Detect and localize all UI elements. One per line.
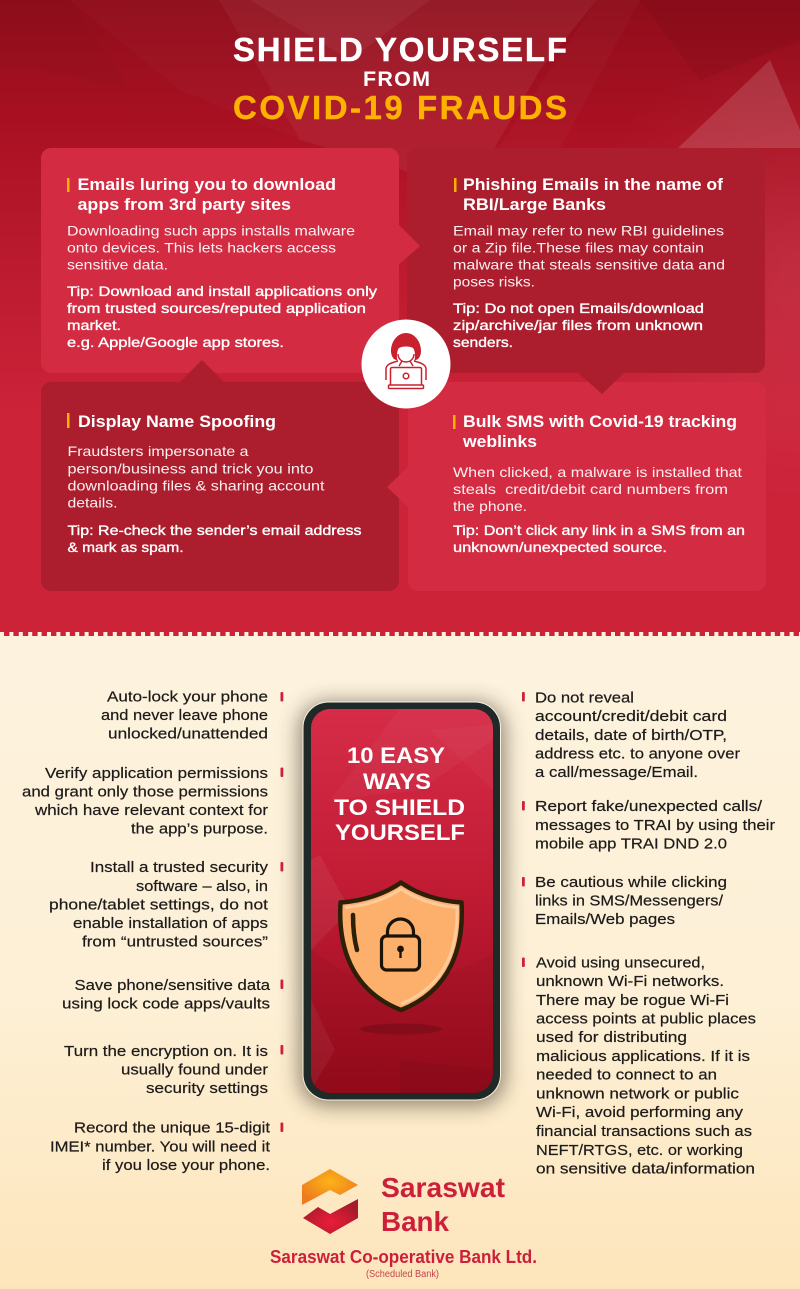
- right tips list: used for distributing: [536, 1030, 687, 1046]
- right tips list: Emails/Web pages: [535, 912, 675, 928]
- right tips list: address etc. to anyone over: [535, 746, 740, 762]
- panel: phishing emails card: RBI/Large Banks: [463, 196, 606, 214]
- left tips list: phone/tablet settings, do not: [49, 898, 268, 914]
- panel: emails luring card: Emails luring you to download: [78, 176, 336, 194]
- panel: phishing emails card: senders.: [453, 334, 513, 350]
- right tips list: on sensitive data/information: [536, 1162, 755, 1178]
- panel: display name spoofing card: [41, 382, 399, 591]
- panel: phishing emails card: Phishing Emails in the name of: [463, 176, 724, 194]
- panel: phishing emails card: or a Zip file.These files may contain: [453, 240, 704, 256]
- panel: phishing emails card: [407, 148, 765, 394]
- logo: Saraswat Bank: (Scheduled Bank): [366, 1269, 439, 1280]
- title: SHIELD YOURSELF: [233, 31, 567, 68]
- title: COVID-19 FRAUDS: [233, 89, 567, 126]
- right tips list: Avoid using unsecured,: [536, 956, 705, 972]
- logo: Saraswat Bank: [270, 1169, 537, 1280]
- left tips list: usually found under: [121, 1062, 268, 1078]
- logo: Saraswat Bank: Bank: [381, 1206, 449, 1237]
- right tips list: account/credit/debit card: [535, 709, 727, 725]
- panel: display name spoofing card: details.: [68, 494, 118, 510]
- phone headline: WAYS: [363, 769, 431, 794]
- right tips list: malicious applications. If it is: [536, 1049, 750, 1065]
- panel: bulk SMS card: the phone.: [453, 498, 527, 514]
- right tips list: details, date of birth/OTP,: [535, 728, 727, 744]
- panel: display name spoofing card: Tip: Re-check the sender’s email address: [68, 522, 362, 538]
- panel: bulk SMS card: When clicked, a malware is installed that: [453, 464, 742, 480]
- panel: display name spoofing card: Display Name Spoofing: [78, 413, 276, 431]
- left tips list: software – also, in: [136, 879, 268, 895]
- panel: emails luring card: sensitive data.: [67, 256, 168, 272]
- right tips list: needed to connect to an: [536, 1068, 717, 1084]
- panel: emails luring card: apps from 3rd party sites: [78, 196, 291, 214]
- right tips list: unknown Wi-Fi networks.: [536, 974, 724, 990]
- panel: display name spoofing card: downloading files & sharing account: [68, 478, 325, 494]
- left tips list: from “untrusted sources”: [82, 934, 268, 950]
- panel: emails luring card: onto devices. This lets hackers access: [67, 240, 336, 256]
- panel: bulk SMS card: Bulk SMS with Covid-19 tracking: [463, 413, 737, 431]
- left tips list: Record the unique 15-digit: [74, 1120, 270, 1136]
- logo: Saraswat Bank: Saraswat: [381, 1172, 505, 1203]
- right tips list: Be cautious while clicking: [535, 875, 727, 891]
- left tips list: security settings: [146, 1081, 268, 1097]
- panel: phishing emails card: zip/archive/jar files from unknown: [453, 317, 703, 333]
- left tips list: Save phone/sensitive data: [74, 978, 271, 994]
- right tips list: Wi-Fi, avoid performing any: [536, 1105, 744, 1121]
- panel: phishing emails card: Tip: Do not open Emails/download: [453, 300, 704, 316]
- arrow: spoofing card pointer: [178, 360, 226, 384]
- left tips list: Turn the encryption on. It is: [64, 1044, 268, 1060]
- panel: phishing emails card: malware that steals sensitive data and: [453, 256, 725, 272]
- panel: cream lower background: [0, 634, 800, 1289]
- right tips list: Do not reveal: [535, 690, 634, 706]
- right tips list: messages to TRAI by using their: [535, 818, 775, 834]
- left tips list: unlocked/unattended: [108, 726, 268, 742]
- panel: emails luring card: e.g. Apple/Google app stores.: [67, 334, 284, 350]
- right tips list: a call/message/Email.: [535, 765, 698, 781]
- panel: bulk SMS card: [387, 382, 766, 591]
- phone headline: YOURSELF: [335, 820, 465, 845]
- panel: display name spoofing card: & mark as spam.: [68, 539, 184, 555]
- phone headline: TO SHIELD: [334, 795, 465, 820]
- title: [233, 31, 567, 126]
- phone headline: [334, 743, 465, 845]
- panel: bulk SMS card: steals credit/debit card numbers from: [453, 481, 728, 497]
- left tips list: Install a trusted security: [90, 860, 269, 876]
- right tips list: [522, 690, 775, 1178]
- right tips list: mobile app TRAI DND 2.0: [535, 836, 727, 852]
- icon: logo mark: [302, 1169, 358, 1234]
- panel: phishing emails card: poses risks.: [453, 274, 535, 290]
- right tips list: financial transactions such as: [536, 1124, 752, 1140]
- left tips list: using lock code apps/vaults: [62, 996, 270, 1012]
- left tips list: Auto-lock your phone: [107, 690, 268, 706]
- phone headline: 10 EASY: [347, 743, 445, 768]
- title: FROM: [363, 67, 430, 91]
- right tips list: There may be rogue Wi-Fi: [536, 993, 729, 1009]
- right tips list: unknown network or public: [536, 1086, 739, 1102]
- right tips list: NEFT/RTGS, etc. or working: [536, 1143, 743, 1159]
- left tips list: and grant only those permissions: [22, 784, 268, 800]
- panel: emails luring card: Downloading such apps installs malware: [67, 222, 355, 238]
- logo: Saraswat Bank: Saraswat Co-operative Bank Ltd.: [270, 1247, 537, 1267]
- left tips list: [22, 690, 283, 1174]
- right tips list: links in SMS/Messengers/: [535, 894, 724, 910]
- right tips list: access points at public places: [536, 1012, 756, 1028]
- panel: bulk SMS card: weblinks: [462, 433, 537, 451]
- left tips list: enable installation of apps: [73, 916, 268, 932]
- panel: bulk SMS card: Tip: Don’t click any link in a SMS from an: [453, 522, 745, 538]
- left tips list: IMEI* number. You will need it: [50, 1140, 270, 1156]
- panel: emails luring card: from trusted sources/reputed application: [67, 300, 366, 316]
- panel: emails luring card: market.: [67, 317, 121, 333]
- tip bullets left: [280, 692, 283, 1132]
- left tips list: and never leave phone: [101, 708, 268, 724]
- panel: red header background: [0, 0, 800, 640]
- icon: shield with padlock: [340, 882, 462, 1034]
- right tips list: Report fake/unexpected calls/: [535, 799, 763, 815]
- icon: hacker with laptop in white circle: [362, 320, 450, 408]
- left tips list: the app’s purpose.: [131, 822, 268, 838]
- left tips list: if you lose your phone.: [102, 1158, 270, 1174]
- panel: bulk SMS card: unknown/unexpected source.: [453, 539, 667, 555]
- phone mockup: [299, 702, 505, 1106]
- panel: phishing emails card: Email may refer to new RBI guidelines: [453, 222, 724, 238]
- left tips list: Verify application permissions: [45, 766, 268, 782]
- panel: display name spoofing card: Fraudsters impersonate a: [68, 443, 249, 459]
- tip bullets right: [522, 692, 525, 967]
- panel: display name spoofing card: person/business and trick you into: [68, 460, 314, 476]
- panel: emails luring card: Tip: Download and install applications only: [67, 283, 377, 299]
- panel: emails luring card: [41, 148, 420, 373]
- left tips list: which have relevant context for: [34, 803, 268, 819]
